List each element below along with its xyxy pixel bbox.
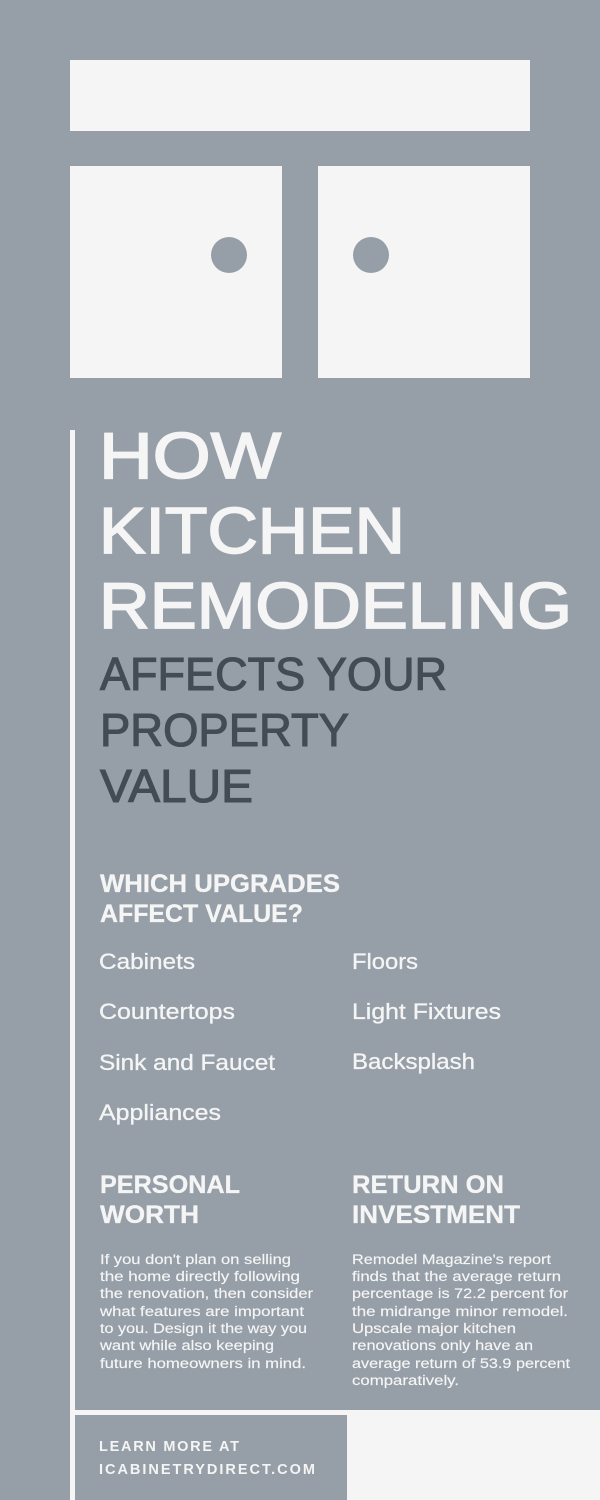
title: REMODELING: [99, 569, 572, 642]
text block: return on investment: [352, 1252, 570, 1389]
heading: personal worth: [100, 1171, 240, 1229]
upgrade list: right column: Floors: [352, 949, 418, 974]
upgrade list: left column: Cabinets: [99, 949, 195, 974]
text block: return on investment: comparatively.: [352, 1373, 459, 1389]
heading: return on investment: RETURN ON: [352, 1171, 504, 1199]
title: [99, 419, 572, 642]
heading: which upgrades affect value: WHICH UPGRADES: [100, 870, 340, 898]
footer: call to action: ICABINETRYDIRECT.COM: [99, 1462, 315, 1478]
upgrade list: left column: Appliances: [99, 1100, 221, 1125]
heading: which upgrades affect value: [100, 870, 340, 928]
vertical accent line: [70, 430, 75, 1500]
footer: call to action: [99, 1439, 315, 1478]
text block: personal worth: what features are important: [99, 1304, 304, 1320]
cabinet right door: [318, 166, 530, 378]
text block: return on investment: average return of 53.9 percent: [352, 1356, 570, 1372]
text block: return on investment: percentage is 72.2 percent for: [352, 1286, 568, 1302]
upgrade list: right column: Light Fixtures: [352, 999, 501, 1024]
subtitle: AFFECTS YOUR: [100, 648, 447, 700]
heading: personal worth: PERSONAL: [100, 1171, 240, 1199]
illustration: kitchen cabinet: [70, 60, 530, 378]
heading: return on investment: INVESTMENT: [352, 1201, 520, 1229]
subtitle: PROPERTY: [100, 704, 349, 756]
upgrade list: right column: [352, 949, 501, 1074]
text block: return on investment: the midrange minor remodel.: [352, 1304, 568, 1320]
left door knob: [211, 237, 247, 273]
cabinet top panel: [70, 60, 530, 131]
text block: personal worth: [99, 1252, 313, 1372]
heading: return on investment: [352, 1171, 520, 1229]
right door knob: [353, 237, 389, 273]
text block: personal worth: want while also keeping: [99, 1338, 274, 1354]
text block: personal worth: future homeowners in mind.: [100, 1356, 306, 1372]
cabinet left door: [70, 166, 282, 378]
text block: personal worth: the renovation, then consider: [100, 1286, 313, 1302]
upgrade list: left column: [99, 949, 275, 1125]
text block: personal worth: If you don't plan on selling: [100, 1252, 291, 1268]
title: KITCHEN: [99, 494, 405, 567]
upgrade list: right column: Backsplash: [352, 1049, 475, 1074]
footer: call to action: LEARN MORE AT: [99, 1439, 239, 1455]
text block: personal worth: to you. Design it the way you: [100, 1321, 307, 1337]
text block: return on investment: Remodel Magazine's report: [352, 1252, 551, 1268]
subtitle: VALUE: [100, 760, 253, 812]
upgrade list: left column: Sink and Faucet: [99, 1050, 275, 1075]
heading: which upgrades affect value: AFFECT VALUE?: [100, 900, 303, 928]
text block: return on investment: Upscale major kitchen: [352, 1321, 516, 1337]
text block: return on investment: finds that the average return: [352, 1269, 561, 1285]
title: HOW: [99, 419, 282, 492]
heading: personal worth: WORTH: [100, 1201, 199, 1229]
footer: white band and corner panel: [75, 1410, 600, 1500]
text block: return on investment: renovations only have an: [352, 1338, 533, 1354]
text block: personal worth: the home directly following: [100, 1269, 300, 1285]
upgrade list: left column: Countertops: [99, 999, 235, 1024]
subtitle: [100, 648, 447, 812]
